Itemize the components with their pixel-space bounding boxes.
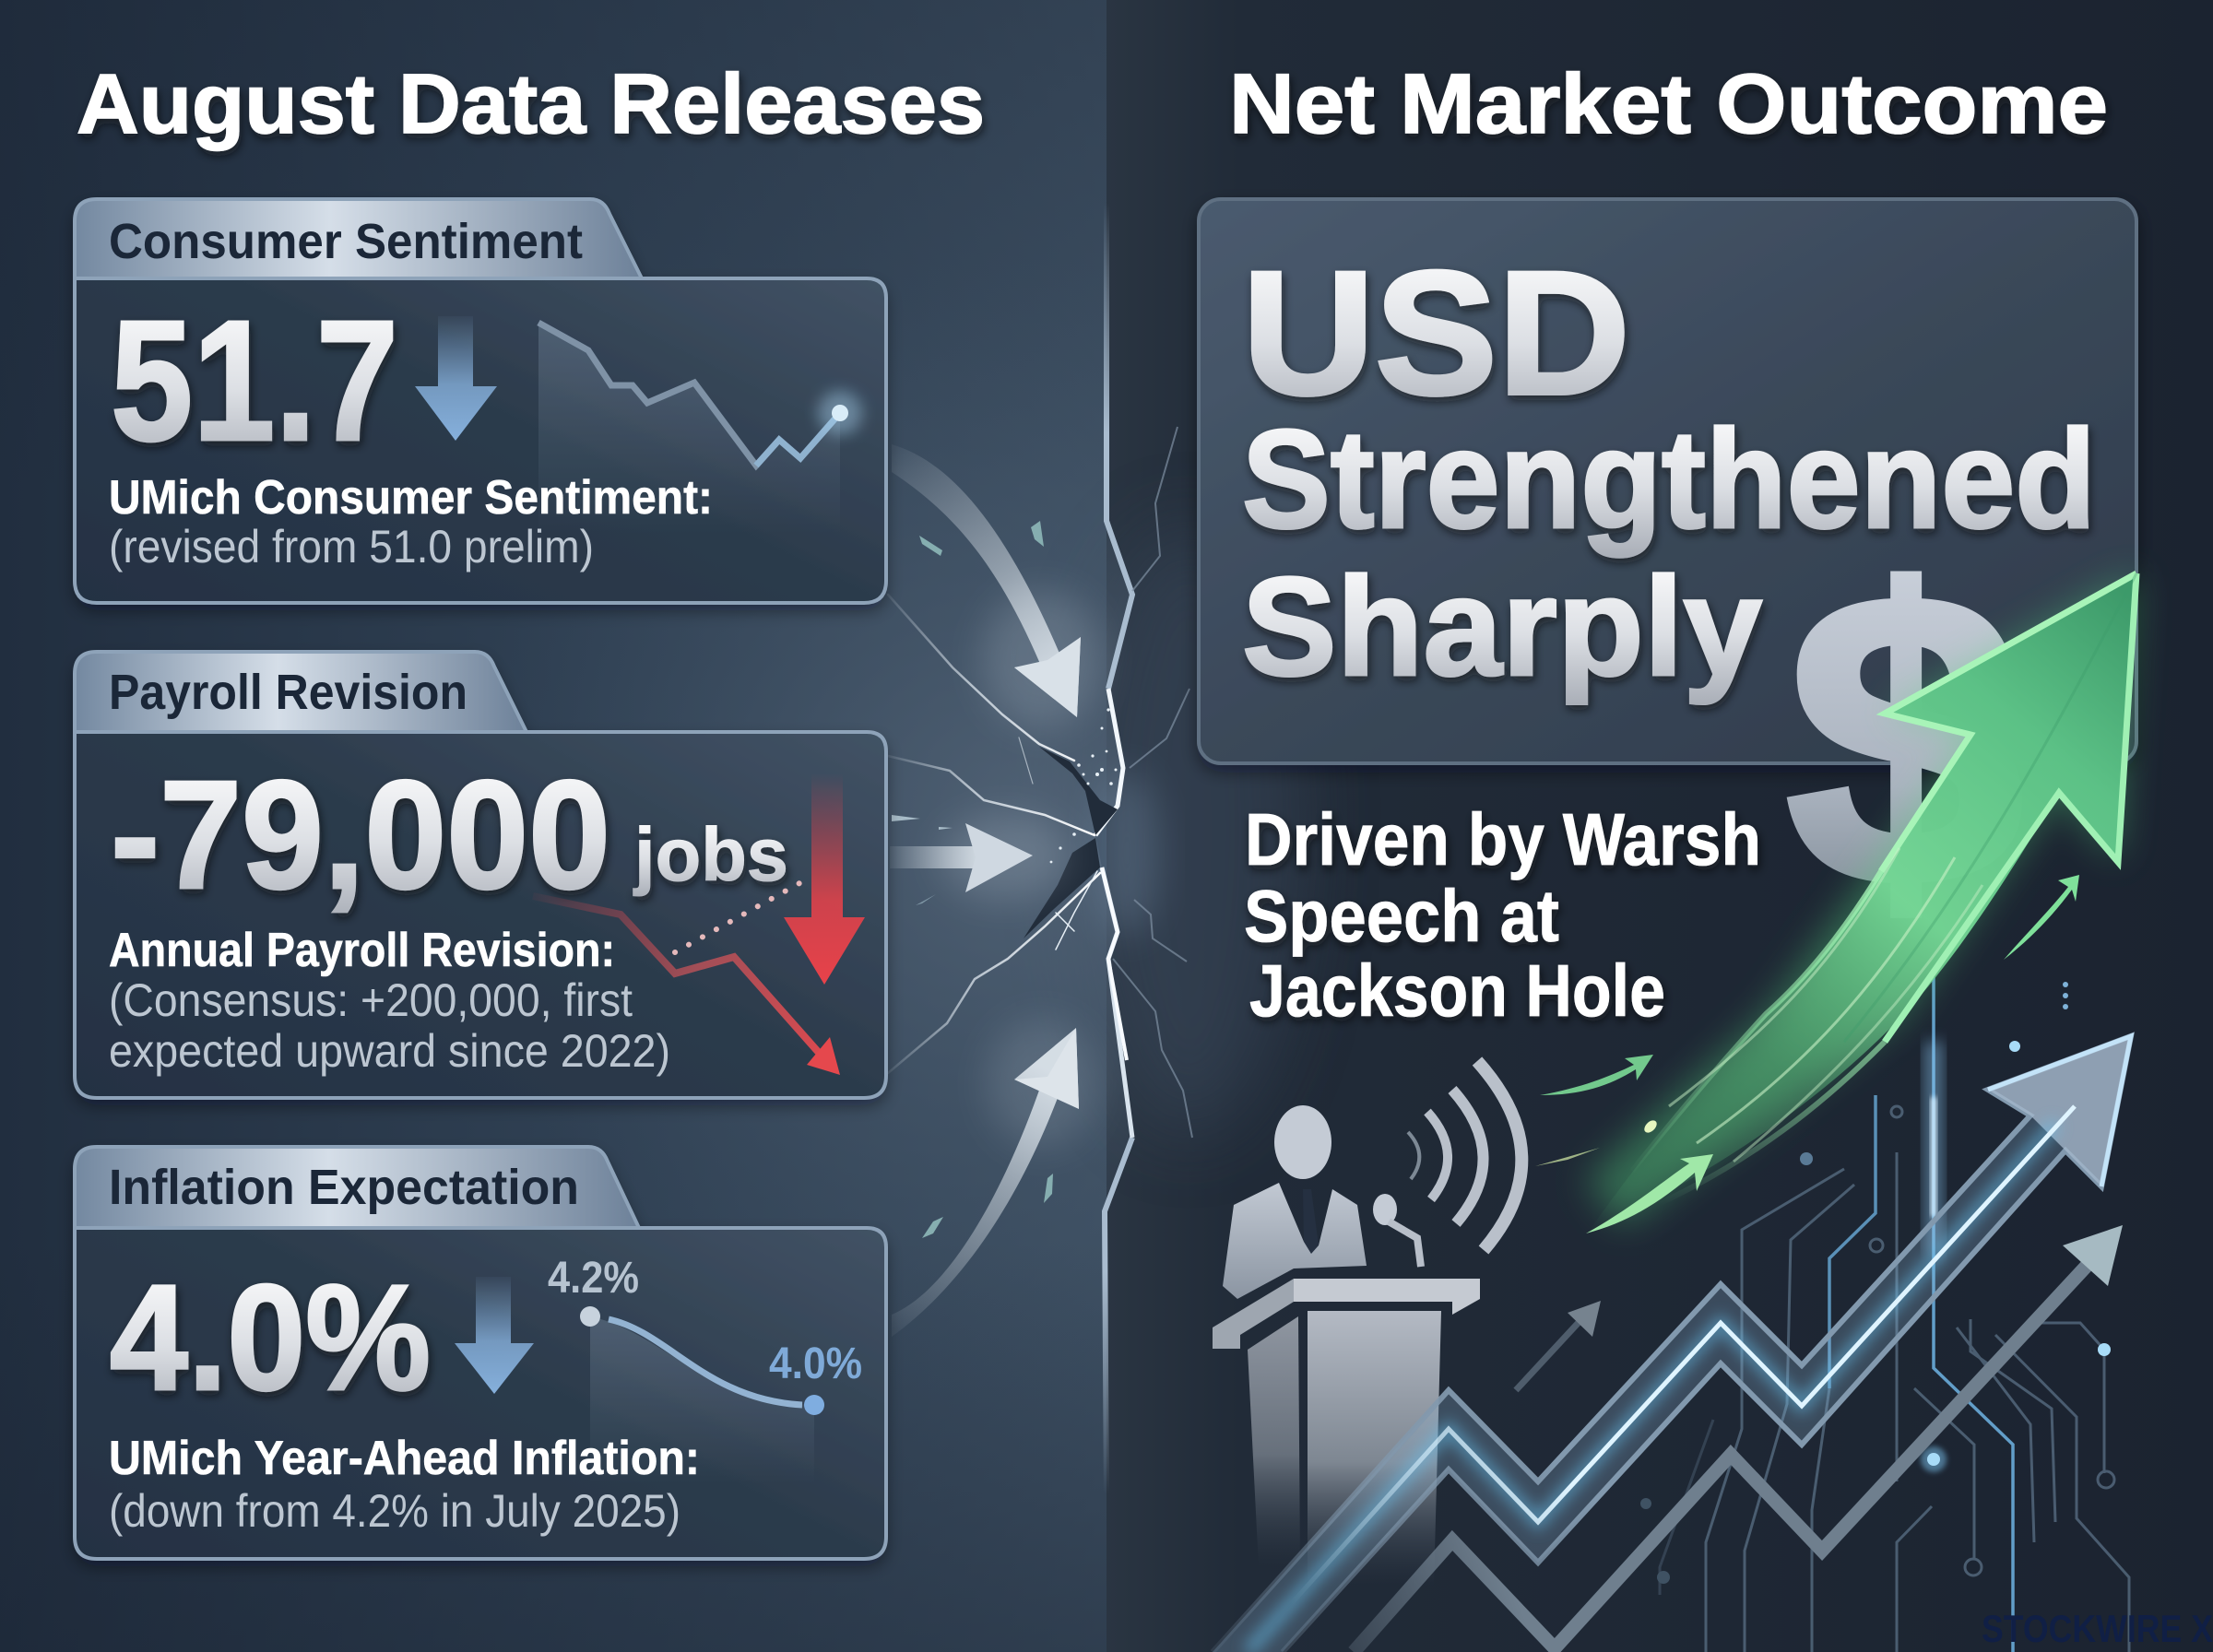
heading: August Data Releases: August Data Releases [77,57,985,151]
fractured divider between halves [0,0,1159,1652]
line chart: 4.2 to 4.0: 4.0% [769,1339,862,1388]
person [1274,1105,1331,1179]
rising zigzag arrow: main bright [1213,1036,2131,1652]
nodes on circuit [1640,982,2111,1584]
line chart: 4.2 to 4.0: 4.2% [548,1254,639,1303]
panel: payroll revision [75,652,886,1098]
subheading: driven by Warsh speech: Jackson Hole [1249,950,1665,1032]
value: -79,000: -79,000 [111,749,610,921]
subheading: driven by Warsh speech: Driven by Warsh [1245,798,1761,880]
headline: Sharply: Sharply [1242,549,1762,705]
unit: jobs: jobs [633,813,788,897]
panel: net market outcome [1199,199,2136,763]
panel: inflation expectation [75,1147,886,1559]
icon: speaker at podium [1213,1061,1521,1586]
heading: Net Market Outcome: Net Market Outcome [1229,57,2108,151]
arrow: consumer sentiment into fracture [892,444,1102,728]
detail: payroll consensus: (Consensus: +200,000, first [109,974,633,1026]
subheading: driven by Warsh speech: Speech at [1244,875,1559,957]
panel tab: inflation expectation [75,1147,639,1228]
microphone [1373,1194,1421,1267]
headline: USD: USD [1242,235,1630,431]
description: inflation: UMich Year-Ahead Inflation: [109,1432,700,1485]
sparkline: sentiment trend [538,323,862,535]
value: 4.0%: 4.0% [110,1253,431,1422]
green growth arrow [1586,573,2136,1235]
rising zigzag arrow: rear thin [1354,1225,2123,1652]
small green arrows [1535,875,2079,1233]
panel tab: payroll revision [75,652,527,732]
panel tab: consumer sentiment [75,199,642,278]
arrow: inflation into fracture [892,1019,1097,1337]
description: payroll: Annual Payroll Revision: [109,924,615,977]
arrow: payroll into fracture [890,815,1070,905]
trend: falling red line [533,896,840,1075]
small grey arrow [1516,1301,1601,1390]
tab label: Payroll Revision [109,665,467,720]
tab label: Inflation Expectation [109,1160,579,1215]
headline: Strengthened: Strengthened [1242,401,2096,558]
trend: dotted expected line [675,882,801,952]
detail: payroll consensus: expected upward since 2022) [109,1025,670,1077]
icon: red down arrow [784,773,865,985]
circuit lines [1660,1106,2129,1652]
value: 51.7: 51.7 [111,286,398,477]
detail: sentiment: (revised from 51.0 prelim) [109,521,594,572]
panel: consumer sentiment [75,199,886,603]
icon: down arrow [455,1277,534,1394]
icon: down arrow [415,316,497,441]
cracks and fracture glow [888,427,1192,1138]
description: sentiment: UMich Consumer Sentiment: [109,471,713,525]
sound waves [1408,1061,1521,1250]
detail: inflation: (down from 4.2% in July 2025) [109,1485,680,1537]
tab label: Consumer Sentiment [109,214,583,269]
podium [1213,1279,1480,1586]
line chart: 4.2 to 4.0 [548,1254,862,1484]
icon: dollar sign: $ [1786,509,2024,972]
